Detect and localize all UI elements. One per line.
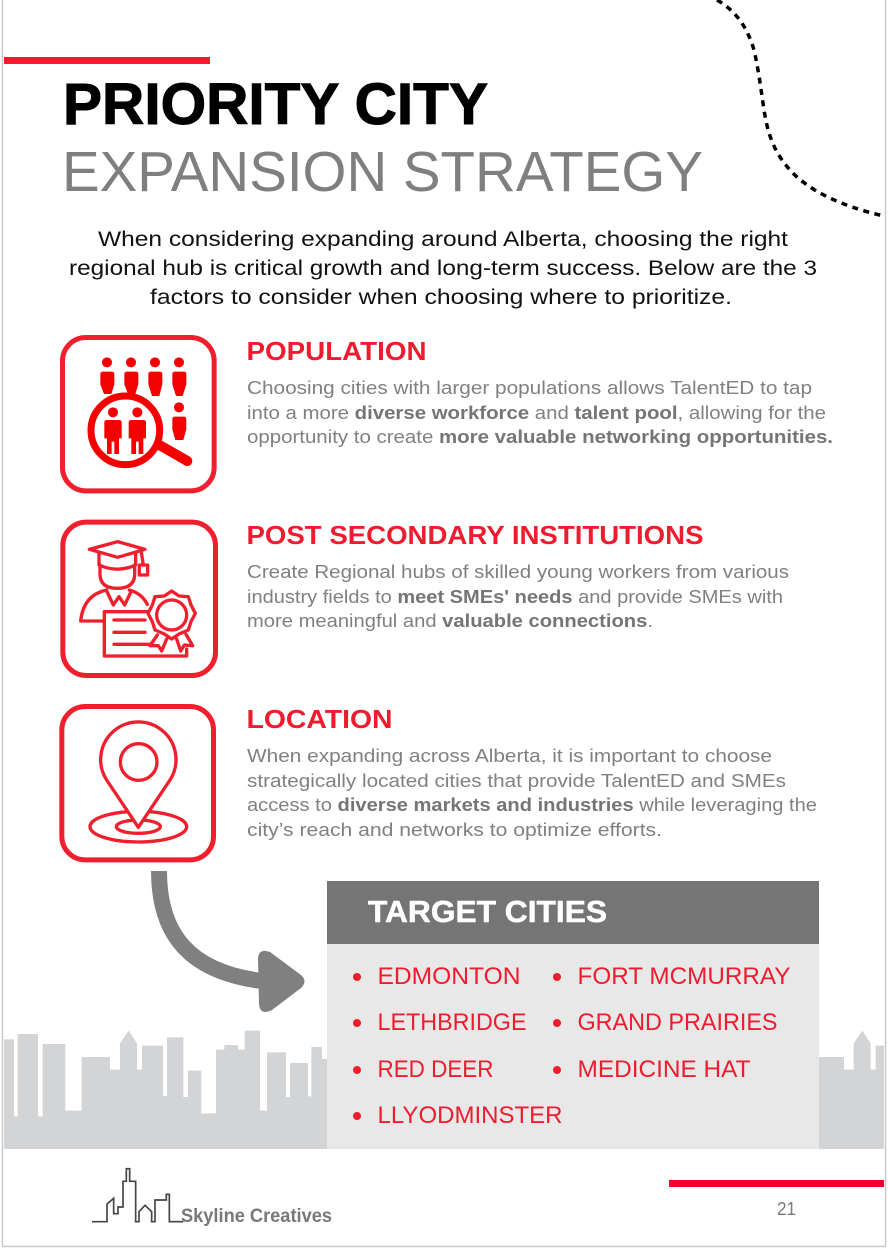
target cities panel	[327, 881, 819, 1149]
curved arrow	[159, 871, 304, 1012]
city list: GRAND PRAIRIES	[578, 1009, 778, 1036]
city list: RED DEER	[378, 1056, 494, 1083]
city list: EDMONTON	[378, 963, 520, 990]
footer logo: Skyline Creatives	[181, 1206, 332, 1227]
page number: 21	[777, 1199, 796, 1219]
target cities header	[327, 881, 819, 944]
city list: FORT MCMURRAY	[578, 963, 790, 990]
skyline right	[819, 1031, 884, 1149]
section: population: opportunity to create more valuable networking opportunities.	[247, 427, 833, 447]
city list	[353, 963, 790, 1129]
icon: population search	[62, 337, 214, 491]
section: post secondary institutions: Create Regional hubs of skilled young workers from various	[247, 562, 789, 582]
decorative dashed curve	[717, 0, 884, 216]
city list: MEDICINE HAT	[578, 1056, 751, 1083]
section: post secondary institutions: more meaningful and valuable connections .	[247, 611, 653, 631]
title: EXPANSION STRATEGY	[62, 140, 703, 203]
section: post secondary institutions: POST SECONDARY INSTITUTIONS	[246, 522, 704, 550]
section: post secondary institutions: industry fields to meet SMEs' needs and provide SMEs with	[247, 587, 783, 607]
section: population	[246, 338, 833, 447]
target cities header: TARGET CITIES	[368, 894, 607, 929]
section: location	[246, 706, 817, 840]
intro paragraph	[69, 228, 817, 309]
section: population: Choosing cities with larger populations allows TalentED to tap	[247, 378, 812, 398]
section: population: into a more diverse workforce and talent pool , allowing for the	[247, 403, 826, 423]
section: location: When expanding across Alberta, it is important to choose	[247, 746, 772, 766]
title: PRIORITY CITY	[63, 72, 488, 137]
section: location: LOCATION	[246, 706, 392, 734]
footer logo	[92, 1169, 332, 1227]
section: location: access to diverse markets and industries while leveraging the	[247, 795, 817, 815]
section: population: POPULATION	[246, 338, 426, 366]
section: post secondary institutions	[246, 522, 789, 631]
section: location: strategically located cities that provide TalentED and SMEs	[247, 771, 786, 791]
icon: location pin	[62, 706, 213, 860]
bottom red accent bar	[669, 1180, 884, 1187]
top red accent bar	[4, 57, 210, 64]
title	[62, 72, 703, 203]
intro paragraph: factors to consider when choosing where to prioritize.	[150, 286, 732, 309]
section: location: city’s reach and networks to optimize efforts.	[247, 820, 662, 840]
city list: LLYODMINSTER	[378, 1102, 562, 1129]
intro paragraph: When considering expanding around Alberta, choosing the right	[98, 228, 788, 251]
icon: graduate and certificate	[63, 522, 215, 675]
city list: LETHBRIDGE	[378, 1009, 526, 1036]
intro paragraph: regional hub is critical growth and long-term success. Below are the 3	[69, 257, 817, 280]
skyline left	[4, 1031, 328, 1149]
